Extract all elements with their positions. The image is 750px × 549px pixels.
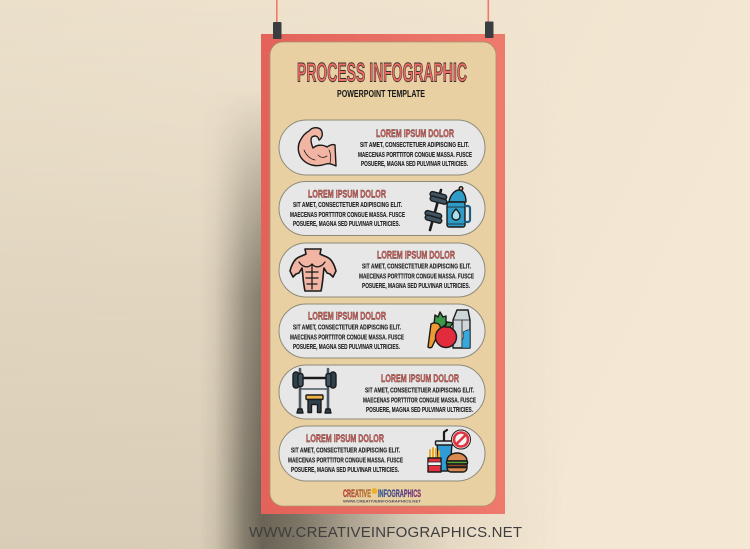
icon: weight bench: [293, 369, 336, 413]
panel: step 3: [279, 243, 485, 297]
icon: flexed bicep: [298, 128, 336, 166]
heading: step 1: LOREM IPSUM DOLOR: [376, 128, 454, 140]
text: step 4: [290, 322, 404, 351]
background wall: [0, 81, 476, 549]
clip right: [485, 22, 494, 38]
text: step 6: SIT AMET, CONSECTETUER ADIPISCING ELIT.: [291, 446, 400, 454]
text: step 2: [290, 200, 405, 228]
poster inner panel: [270, 42, 496, 506]
text: step 2: POSUERE, MAGNA SED PULVINAR ULTRICIES.: [293, 219, 400, 228]
text: step 5: POSUERE, MAGNA SED PULVINAR ULTRICIES.: [366, 405, 473, 414]
heading: step 6: LOREM IPSUM DOLOR: [306, 433, 384, 445]
hanging string left: [276, 0, 278, 24]
heading: step 4: LOREM IPSUM DOLOR: [308, 310, 386, 322]
website url: WWW.CREATIVEINFOGRAPHICS.NET: [249, 524, 522, 541]
text: step 6: MAECENAS PORTTITOR CONGUE MASSA. FUSCE: [288, 456, 403, 464]
icon: muscular torso: [290, 249, 336, 291]
text: step 5: MAECENAS PORTTITOR CONGUE MASSA. FUSCE: [363, 396, 476, 404]
icon: light bulb: [372, 488, 378, 494]
panel: step 5: [279, 365, 485, 419]
text: step 2: SIT AMET, CONSECTETUER ADIPISCING ELIT.: [293, 200, 402, 209]
icon: dumbbell and water bottle: [424, 187, 470, 230]
poster frame: [261, 34, 505, 514]
text: step 1: SIT AMET, CONSECTETUER ADIPISCING ELIT.: [360, 140, 469, 149]
logo: WWW.CREATIVEINFOGRAPHICS.NET: [343, 498, 422, 504]
text: step 2: MAECENAS PORTTITOR CONGUE MASSA. FUSCE: [290, 210, 405, 219]
panel: step 4: [279, 304, 485, 358]
text: step 3: SIT AMET, CONSECTETUER ADIPISCING ELIT.: [362, 262, 471, 270]
panel: step 2: [279, 182, 485, 236]
icon: junk food prohibited: [428, 430, 470, 472]
clip left: [273, 22, 282, 39]
text: step 5: [363, 386, 476, 414]
text: step 3: MAECENAS PORTTITOR CONGUE MASSA. FUSCE: [359, 272, 474, 280]
heading: step 3: LOREM IPSUM DOLOR: [377, 250, 455, 262]
text: step 6: [288, 446, 403, 474]
text: step 1: POSUERE, MAGNA SED PULVINAR ULTRICIES.: [361, 159, 468, 168]
logo: CREATIVE: [343, 488, 371, 500]
text: step 4: POSUERE, MAGNA SED PULVINAR ULTRICIES.: [293, 342, 400, 351]
heading: step 2: LOREM IPSUM DOLOR: [308, 188, 386, 200]
poster shadow: [209, 106, 428, 549]
text: step 4: SIT AMET, CONSECTETUER ADIPISCING ELIT.: [293, 322, 401, 332]
logo: [343, 488, 422, 504]
text: step 1: [358, 140, 472, 168]
panel: step 1: [279, 120, 485, 175]
hanging string right: [488, 0, 489, 23]
icon: healthy food: [428, 310, 470, 348]
text: step 3: POSUERE, MAGNA SED PULVINAR ULTRICIES.: [362, 281, 470, 290]
text: step 5: SIT AMET, CONSECTETUER ADIPISCING ELIT.: [365, 386, 474, 394]
logo: INFOGRAPHICS: [378, 488, 421, 500]
text: step 4: MAECENAS PORTTITOR CONGUE MASSA. FUSCE: [290, 332, 404, 342]
heading: step 5: LOREM IPSUM DOLOR: [381, 373, 459, 385]
text: step 1: MAECENAS PORTTITOR CONGUE MASSA. FUSCE: [358, 150, 472, 159]
text: step 6: POSUERE, MAGNA SED PULVINAR ULTRICIES.: [291, 465, 399, 474]
text: step 3: [359, 262, 474, 290]
title: PROCESS INFOGRAPHIC: [297, 58, 467, 88]
panel: step 6: [279, 426, 485, 481]
subtitle: POWERPOINT TEMPLATE: [337, 89, 425, 100]
